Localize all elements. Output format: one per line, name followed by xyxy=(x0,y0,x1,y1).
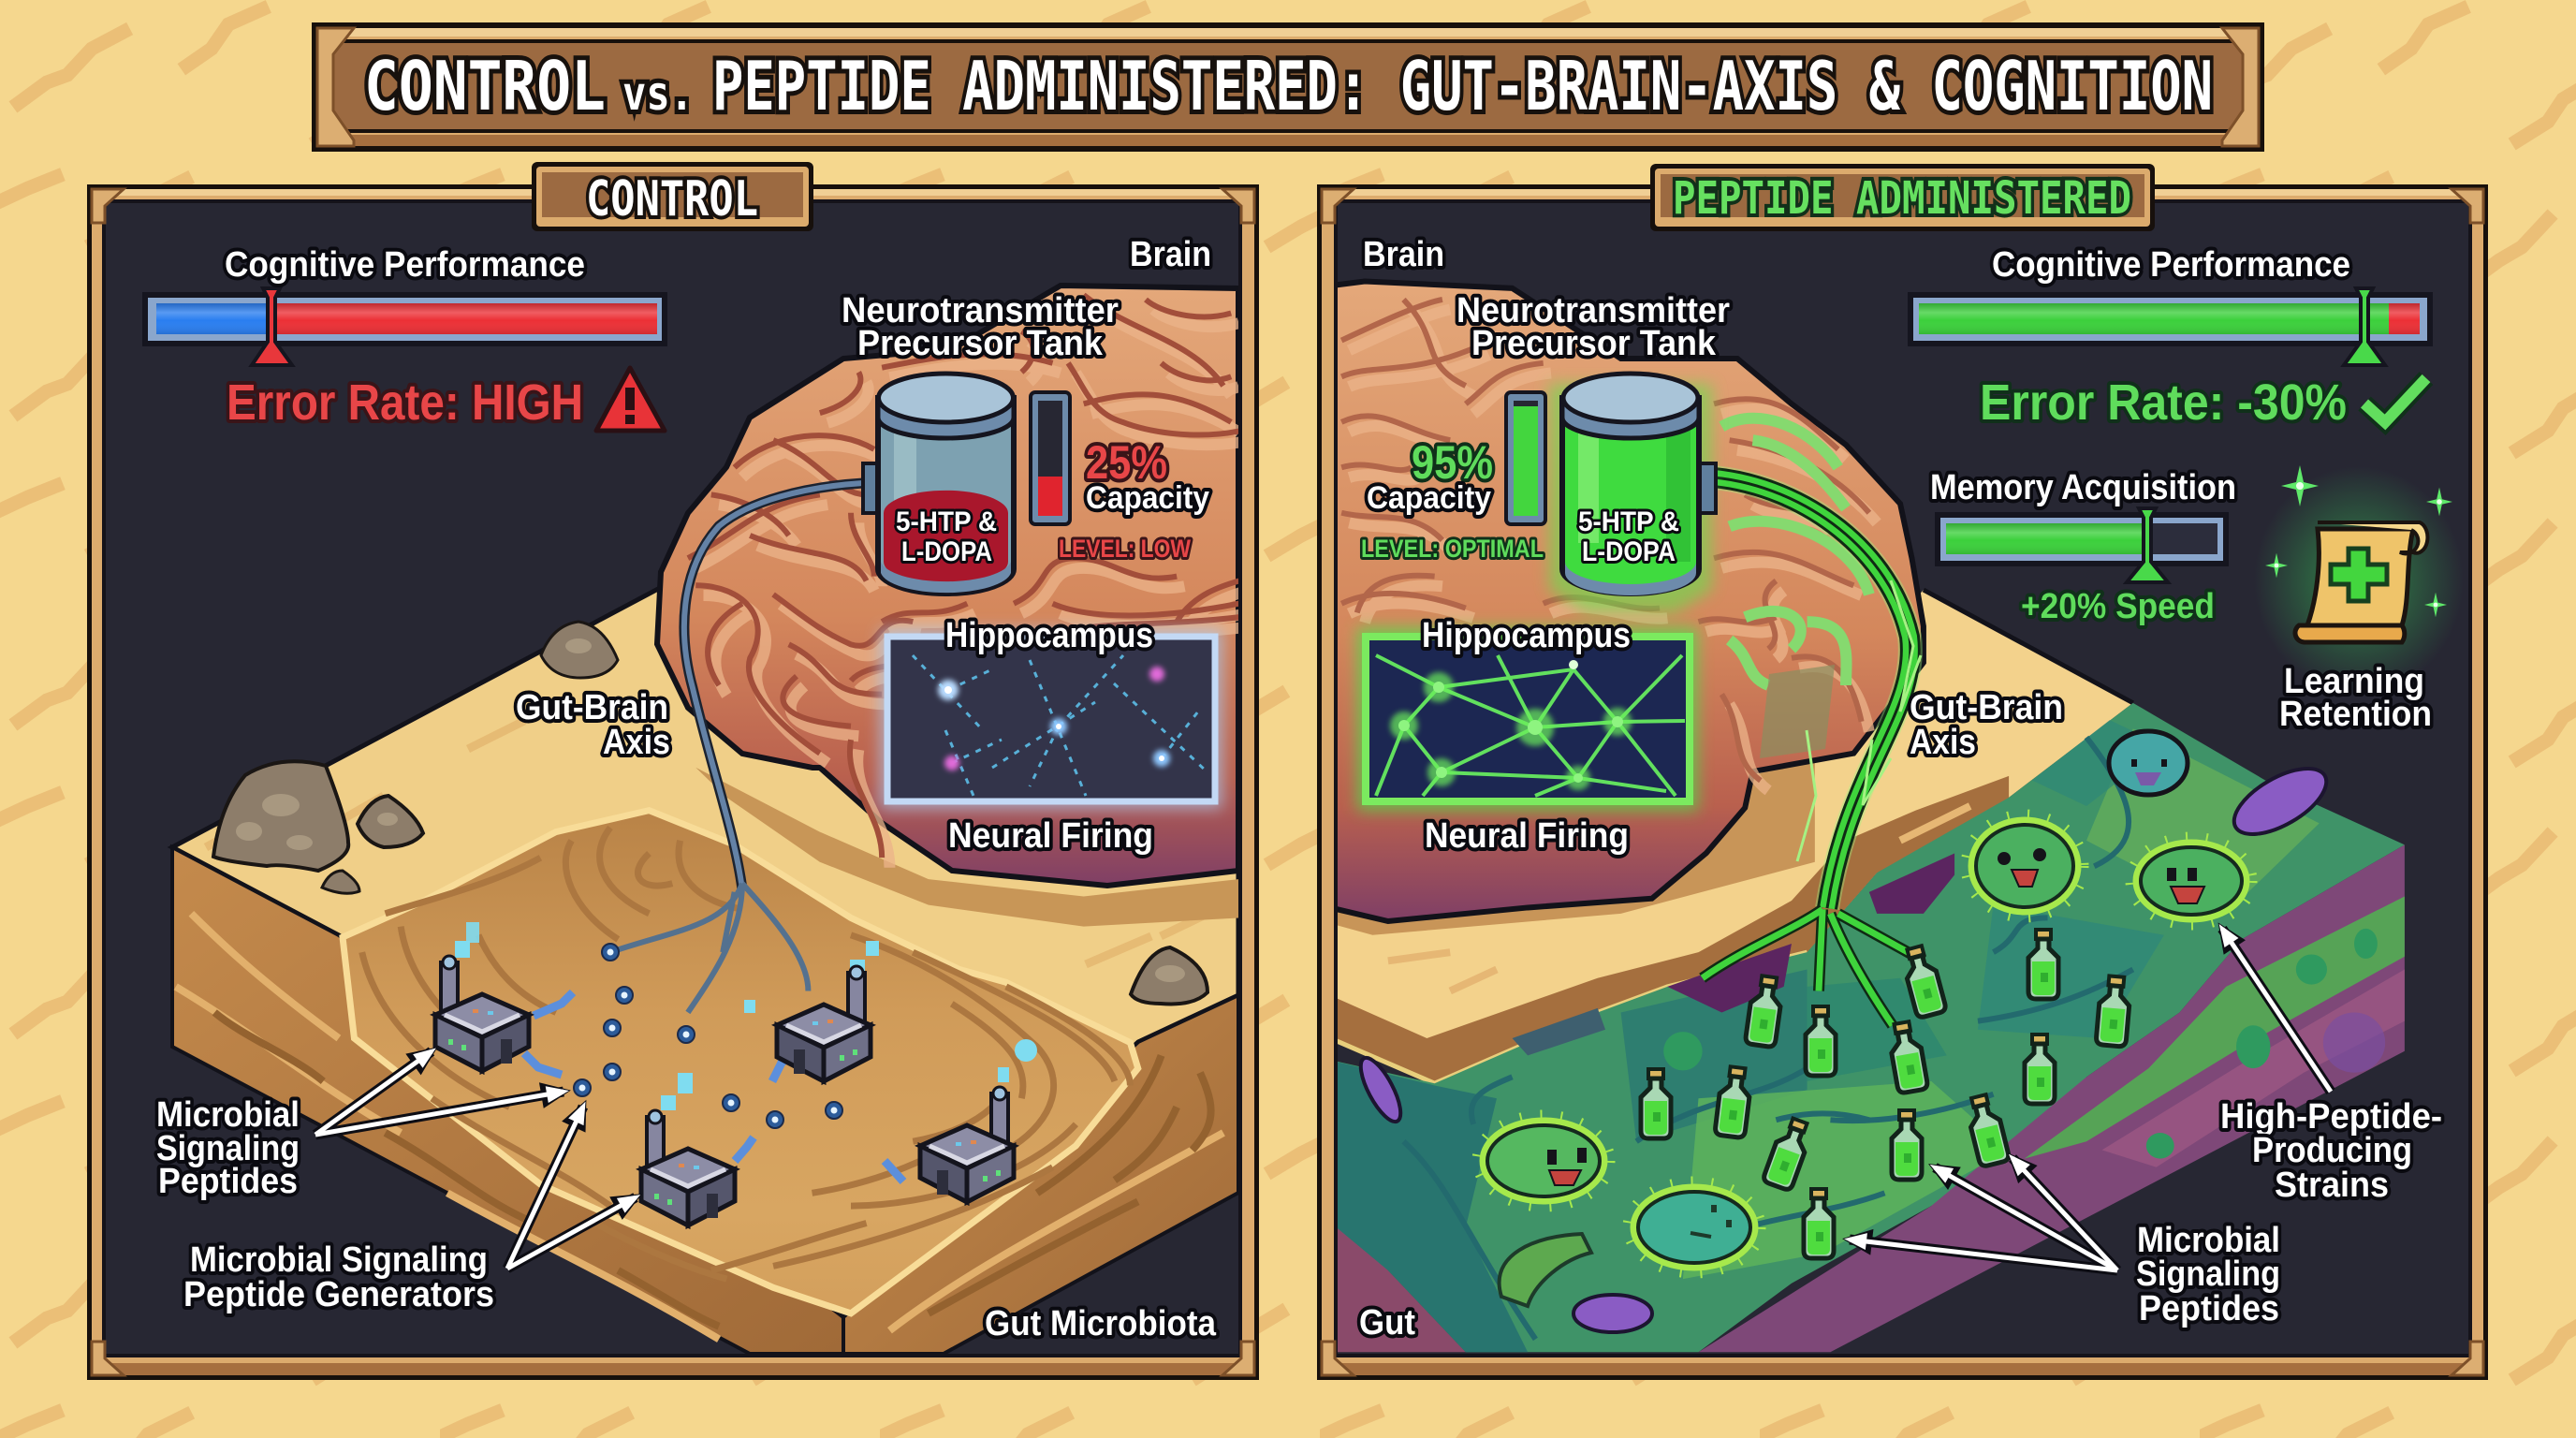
gut-brain axis nerve: glowing xyxy=(1703,477,1924,1025)
sand ground block xyxy=(172,580,1238,1354)
label: tank: Neurotransmitter xyxy=(842,291,1119,330)
badge: peptide administered: PEPTIDE ADMINISTERED xyxy=(1673,172,2131,225)
brain xyxy=(1310,282,1924,921)
label: high-peptide-producing strains xyxy=(2220,1097,2442,1205)
bacterium 2 xyxy=(2130,836,2253,926)
label: tank: Neurotransmitter xyxy=(1456,291,1730,330)
cognitive performance label: control: Cognitive Performance xyxy=(225,245,585,285)
capacity labels: control: Capacity xyxy=(1086,480,1209,516)
microbial signaling peptides: vials xyxy=(1641,930,2131,1258)
label: tank: Precursor Tank xyxy=(1471,324,1717,363)
label: gut-brain axis: Axis xyxy=(1910,723,1976,762)
label: brain: Brain xyxy=(1363,235,1444,274)
label: learning retention: Learning xyxy=(2284,662,2424,701)
label: microbial signaling peptides: Peptides xyxy=(158,1162,298,1201)
hippocampus panel xyxy=(1357,627,1698,811)
high-peptide-producing strains: smiling bacteria xyxy=(1476,731,2253,1274)
capacity labels: control xyxy=(1059,436,1209,563)
label: brain: Brain xyxy=(1130,235,1211,274)
label: microbial signaling peptides xyxy=(2136,1221,2280,1328)
panel frame xyxy=(87,184,1259,1380)
label: neural firing: Neural Firing xyxy=(1425,816,1629,856)
title text: vs. xyxy=(622,66,694,121)
memory acquisition label: Memory Acquisition xyxy=(1930,468,2236,507)
icon: rocks xyxy=(213,622,1208,1004)
capacity labels: peptide: LEVEL: OPTIMAL xyxy=(1361,535,1544,563)
title banner xyxy=(312,22,2264,152)
label: gut-brain axis xyxy=(516,688,670,762)
tank contents label: peptide: 5-HTP & xyxy=(1578,506,1679,537)
capacity labels: peptide xyxy=(1361,436,1544,563)
label: high-peptide-producing strains: Strains xyxy=(2275,1166,2389,1205)
label: neural firing: Neural Firing xyxy=(948,816,1153,856)
label: high-peptide-producing strains: Producing xyxy=(2252,1131,2412,1170)
icon: learning retention scroll xyxy=(2254,465,2464,695)
badge: peptide administered xyxy=(1650,164,2155,231)
excavated pit xyxy=(343,768,1239,1313)
neurotransmitter precursor tank: full xyxy=(1549,374,1716,613)
panel: control xyxy=(87,162,1259,1380)
label: high-peptide-producing strains: High-Peptide- xyxy=(2220,1097,2442,1137)
error rate text: -30%: Error Rate: -30% xyxy=(1980,374,2347,431)
capacity labels: control: 25% xyxy=(1086,436,1167,489)
scene: thriving gut and brain xyxy=(1310,282,2405,1352)
memory acquisition bar xyxy=(1938,508,2226,582)
label: tank xyxy=(1456,291,1730,363)
gut-brain axis nerve xyxy=(610,483,863,1012)
label: gut microbiota: Gut Microbiota xyxy=(985,1304,1217,1343)
icon: check mark xyxy=(2364,378,2426,422)
badge: control: CONTROL xyxy=(586,171,758,227)
label: hippocampus: Hippocampus xyxy=(1422,616,1631,655)
icon: warning triangle xyxy=(596,368,665,431)
error rate text: high: Error Rate: HIGH xyxy=(227,374,583,431)
cognitive performance bar: control xyxy=(145,288,665,365)
label: microbial signaling peptides xyxy=(156,1095,300,1201)
capacity gauge: 95% xyxy=(1506,392,1545,524)
sand ground xyxy=(1310,590,2133,1083)
gut lining landscape xyxy=(1310,703,2405,1352)
label: gut: Gut xyxy=(1359,1303,1415,1343)
bacterium 3 xyxy=(1476,1114,1611,1208)
capacity labels: peptide: Capacity xyxy=(1367,480,1491,516)
label: tank: Precursor Tank xyxy=(857,324,1104,363)
label: microbial signaling peptides: Signaling xyxy=(156,1129,300,1168)
arrows: control callouts xyxy=(315,1051,636,1269)
cognitive performance label: peptide: Cognitive Performance xyxy=(1992,245,2350,285)
label: hippocampus: Hippocampus xyxy=(945,616,1153,655)
panel frame xyxy=(1317,184,2488,1380)
microbial signaling peptides: particles xyxy=(455,922,1037,1181)
bacterium 4 xyxy=(1627,1181,1762,1274)
label: microbial signaling peptides: Signaling xyxy=(2136,1255,2280,1294)
memory speed label: +20% Speed xyxy=(2021,587,2215,626)
badge: control xyxy=(532,162,813,231)
brain xyxy=(657,286,1247,886)
label: peptide generators: Peptide Generators xyxy=(183,1275,494,1314)
label: microbial signaling peptides: Microbial xyxy=(156,1095,300,1135)
title text: CONTROL xyxy=(364,47,606,125)
label: gut-brain axis xyxy=(1910,688,2063,762)
tank contents label: control: 5-HTP & xyxy=(896,506,997,537)
panel: peptide administered xyxy=(1310,164,2488,1380)
microbial signaling peptide generators xyxy=(435,956,1014,1225)
neurotransmitter precursor tank: low xyxy=(863,374,1014,594)
label: tank xyxy=(842,291,1119,363)
purple microbes xyxy=(1354,756,2336,1332)
label: gut-brain axis: Gut-Brain xyxy=(1910,688,2063,727)
bacterium 5 xyxy=(2109,731,2188,795)
hippocampus panel xyxy=(880,629,1222,809)
tank contents label: peptide: L-DOPA xyxy=(1582,536,1676,567)
label: learning retention xyxy=(2279,662,2432,734)
label: learning retention: Retention xyxy=(2279,695,2432,734)
label: microbial signaling peptides: Microbial xyxy=(2137,1221,2280,1260)
label: microbial signaling peptides: Peptides xyxy=(2139,1289,2279,1328)
bacterium 1 xyxy=(1965,814,2085,918)
label: gut-brain axis: Axis xyxy=(603,723,670,762)
tank contents label: control: L-DOPA xyxy=(901,536,992,567)
tank contents label: peptide xyxy=(1578,506,1679,567)
green worm microbe xyxy=(1500,1234,1591,1306)
capacity gauge: 25% xyxy=(1031,392,1070,524)
label: gut-brain axis: Gut-Brain xyxy=(516,688,668,727)
capacity labels: peptide: 95% xyxy=(1412,436,1493,489)
label: peptide generators xyxy=(183,1240,494,1314)
cognitive performance bar: peptide xyxy=(1910,288,2430,365)
arrows: peptide callouts xyxy=(1850,929,2331,1270)
tank contents label: control xyxy=(896,506,997,567)
label: peptide generators: Microbial Signaling xyxy=(190,1240,488,1280)
capacity labels: control: LEVEL: LOW xyxy=(1059,535,1191,563)
title text xyxy=(364,47,2213,125)
scene: barren gut and brain xyxy=(172,286,1247,1354)
